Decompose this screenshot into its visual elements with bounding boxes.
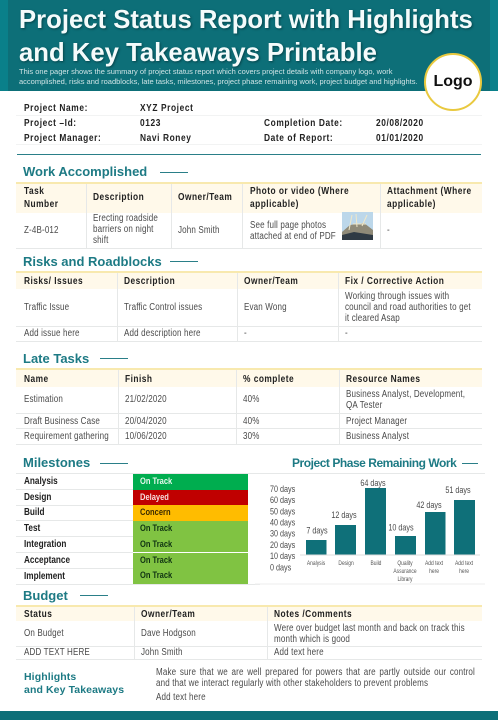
budget row 2 notes: Add text here	[274, 647, 324, 658]
risk row 1 issue: Traffic Issue	[24, 302, 69, 313]
attachment value: -	[387, 225, 390, 236]
category labels: Library	[398, 577, 413, 583]
risk row 1 action	[345, 291, 471, 324]
status: analysis on track: On Track	[140, 476, 172, 486]
y axis labels: 30 days	[270, 529, 295, 539]
task row 1 resources: QA Tester	[346, 400, 382, 411]
category labels: Quality	[397, 561, 413, 567]
risk row 2 description: Add description here	[124, 328, 201, 339]
project id label: Project –Id:	[24, 118, 77, 129]
left header edge	[0, 0, 8, 91]
column header: attachment	[387, 186, 472, 210]
milestone: design: Design	[24, 492, 51, 503]
column header: attachment: Attachment (Where	[387, 186, 472, 197]
heading: highlights and key takeaways: Highlights	[24, 671, 76, 683]
column header: owner: Owner/Team	[178, 192, 232, 203]
bar chart: project phase remaining work	[255, 473, 485, 584]
status: acceptance on track	[133, 553, 248, 568]
risk row 2 action: -	[345, 328, 348, 339]
description value: barriers on night	[93, 224, 154, 235]
table: work accomplished	[16, 182, 482, 249]
task row 3 finish: 10/06/2020	[125, 431, 167, 442]
heading: risks and roadblocks: Risks and Roadblocks	[23, 254, 162, 269]
title: and Key Takeaways Printable	[19, 38, 377, 66]
task row 2 resources: Project Manager	[346, 416, 407, 427]
task row 1 resources	[346, 389, 465, 411]
project manager label: Project Manager:	[24, 133, 101, 144]
table: budget	[16, 605, 482, 660]
heading: late tasks: Late Tasks	[23, 351, 89, 366]
category labels: Assurance	[393, 569, 417, 575]
column header: task number: Task	[24, 186, 44, 197]
task number value: Z-4B-012	[24, 225, 59, 236]
milestone: analysis: Analysis	[24, 476, 58, 487]
status: implement on track	[133, 568, 248, 584]
logo badge	[424, 53, 482, 111]
risk row 1 action: it cleared Asap	[345, 313, 400, 324]
text: highlights body	[156, 667, 475, 703]
photo note: attached at end of PDF	[250, 231, 336, 242]
column header: corrective action: Fix / Corrective Action	[345, 276, 444, 287]
column header: task number: Number	[24, 199, 58, 210]
text: highlights body: and that we interact regularly with other stakeholders to prevent problems	[156, 678, 428, 689]
column header: description: Description	[93, 192, 144, 203]
footer bar	[0, 711, 498, 720]
y axis labels: 70 days	[270, 484, 295, 494]
project id value: 0123	[140, 118, 161, 129]
subtitle: accomplished, risks and roadblocks, late tasks, milestones, project phase remaining work, project budget and highlights.	[19, 77, 418, 86]
budget row 1 notes: Were over budget last month and back on track this	[274, 623, 465, 634]
task row 1 finish: 21/02/2020	[125, 394, 167, 405]
column header: percent complete: % complete	[243, 374, 294, 385]
column header: attachment: applicable)	[387, 199, 436, 210]
bar value labels: 64 days	[360, 478, 386, 488]
budget row 1 status: On Budget	[24, 628, 64, 639]
category labels: Add text	[455, 561, 473, 567]
description value	[93, 213, 158, 246]
project manager value: Navi Roney	[140, 133, 191, 144]
category labels	[307, 561, 473, 583]
y axis labels: 20 days	[270, 540, 295, 550]
milestone: test: Test	[24, 523, 40, 534]
table: risks and roadblocks	[16, 271, 482, 342]
status: build concern: Concern	[140, 507, 171, 517]
column header: owner: Owner/Team	[244, 276, 298, 287]
column header: description: Description	[124, 276, 175, 287]
category labels: here	[459, 569, 469, 575]
text: highlights body: Add text here	[156, 692, 206, 703]
budget row 1 owner: Dave Hodgson	[141, 628, 196, 639]
title: Project Status Report with Highlights	[19, 6, 473, 34]
status: test on track	[133, 521, 248, 537]
column header: photo	[250, 186, 349, 210]
bars	[306, 488, 475, 554]
description value: Erecting roadside	[93, 213, 158, 224]
title	[19, 6, 474, 68]
heading: work accomplished: Work Accomplished	[23, 164, 147, 179]
task row 3 percent: 30%	[243, 431, 260, 442]
project name value: XYZ Project	[140, 103, 193, 114]
risk row 1 action: council and road authorities to get	[345, 302, 471, 313]
category labels: Analysis	[307, 561, 325, 567]
status: test on track: On Track	[140, 523, 172, 533]
task row 1: Estimation	[24, 394, 63, 405]
milestone: integration: Integration	[24, 539, 66, 550]
heading: highlights and key takeaways	[24, 671, 124, 696]
risk row 2 issue: Add issue here	[24, 328, 80, 339]
status: integration on track	[133, 537, 248, 552]
owner value: John Smith	[178, 225, 220, 236]
logo badge: Logo	[433, 73, 473, 90]
risk row 1 owner: Evan Wong	[244, 302, 287, 313]
photo note	[250, 220, 336, 242]
budget row 2 owner: John Smith	[141, 647, 183, 658]
project details	[16, 103, 482, 145]
status: design delayed: Delayed	[140, 492, 169, 502]
task row 2 percent: 40%	[243, 416, 260, 427]
bar value labels: 51 days	[445, 485, 471, 495]
task row 2: Draft Business Case	[24, 416, 100, 427]
panel: milestones list	[16, 473, 260, 585]
category labels: Add text	[425, 561, 443, 567]
task row 3 resources: Business Analyst	[346, 431, 409, 442]
column header: photo: applicable)	[250, 199, 299, 210]
task row 1 percent: 40%	[243, 394, 260, 405]
date of report value: 01/01/2020	[376, 133, 424, 144]
status: implement on track: On Track	[140, 570, 172, 580]
budget row 1 notes	[274, 623, 465, 645]
text: highlights body: Make sure that we are well prepared for powers that are partly outside our control	[156, 667, 475, 678]
task row 2 finish: 20/04/2020	[125, 416, 167, 427]
y axis labels: 10 days	[270, 551, 295, 561]
category labels: Design	[338, 561, 354, 567]
bar value labels: 12 days	[331, 510, 357, 520]
y axis labels: 50 days	[270, 507, 295, 517]
status: integration on track: On Track	[140, 539, 172, 549]
risk row 2 owner: -	[244, 328, 247, 339]
budget row 1 notes: month which is good	[274, 634, 350, 645]
y axis labels: 40 days	[270, 518, 295, 528]
column header: notes: Notes /Comments	[274, 609, 352, 620]
bar value labels: 7 days	[306, 526, 328, 536]
heading: budget: Budget	[23, 588, 68, 603]
bar value labels: 10 days	[388, 523, 414, 533]
header rule	[17, 154, 481, 155]
status: analysis on track	[133, 474, 248, 490]
column header: name: Name	[24, 374, 49, 385]
y axis labels	[270, 484, 295, 573]
subtitle: This one pager shows the summary of project status report which covers project details with company logo, work	[19, 67, 392, 76]
row dividers	[16, 115, 482, 145]
project name label: Project Name:	[24, 103, 88, 114]
budget row 2 status: ADD TEXT HERE	[24, 647, 90, 658]
header banner	[0, 0, 498, 91]
category labels: here	[429, 569, 439, 575]
column header: task number	[24, 186, 58, 210]
risk row 1 action: Working through issues with	[345, 291, 449, 302]
milestone: acceptance: Acceptance	[24, 555, 70, 566]
completion date label: Completion Date:	[264, 118, 343, 129]
bar value labels	[306, 478, 471, 536]
heading: milestones: Milestones	[23, 455, 90, 470]
heading: project phase remaining work: Project Phase Remaining Work	[292, 456, 456, 470]
column header: owner: Owner/Team	[141, 609, 195, 620]
task row 1 resources: Business Analyst, Development,	[346, 389, 465, 400]
milestone: implement: Implement	[24, 571, 65, 582]
task row 3: Requirement gathering	[24, 431, 109, 442]
photo thumbnail	[342, 212, 373, 240]
column header: resource names: Resource Names	[346, 374, 420, 385]
risk row 1 description: Traffic Control issues	[124, 302, 202, 313]
column header: status: Status	[24, 609, 52, 620]
status: design delayed	[133, 490, 248, 505]
y axis labels: 60 days	[270, 495, 295, 505]
heading: highlights and key takeaways: and Key Takeaways	[24, 684, 124, 696]
right header edge	[490, 0, 498, 91]
status: acceptance on track: On Track	[140, 555, 172, 565]
milestone: build: Build	[24, 507, 44, 518]
subtitle	[19, 67, 418, 86]
status: build concern	[133, 505, 248, 521]
bar value labels: 42 days	[416, 500, 442, 510]
photo note: See full page photos	[250, 220, 326, 231]
date of report label: Date of Report:	[264, 133, 333, 144]
column header: finish: Finish	[125, 374, 152, 385]
column header: photo: Photo or video (Where	[250, 186, 349, 197]
y axis labels: 0 days	[270, 563, 291, 573]
table: late tasks	[16, 368, 482, 445]
column header: risks: Risks/ Issues	[24, 276, 83, 287]
completion date value: 20/08/2020	[376, 118, 424, 129]
category labels: Build	[371, 561, 381, 567]
description value: shift	[93, 235, 108, 246]
